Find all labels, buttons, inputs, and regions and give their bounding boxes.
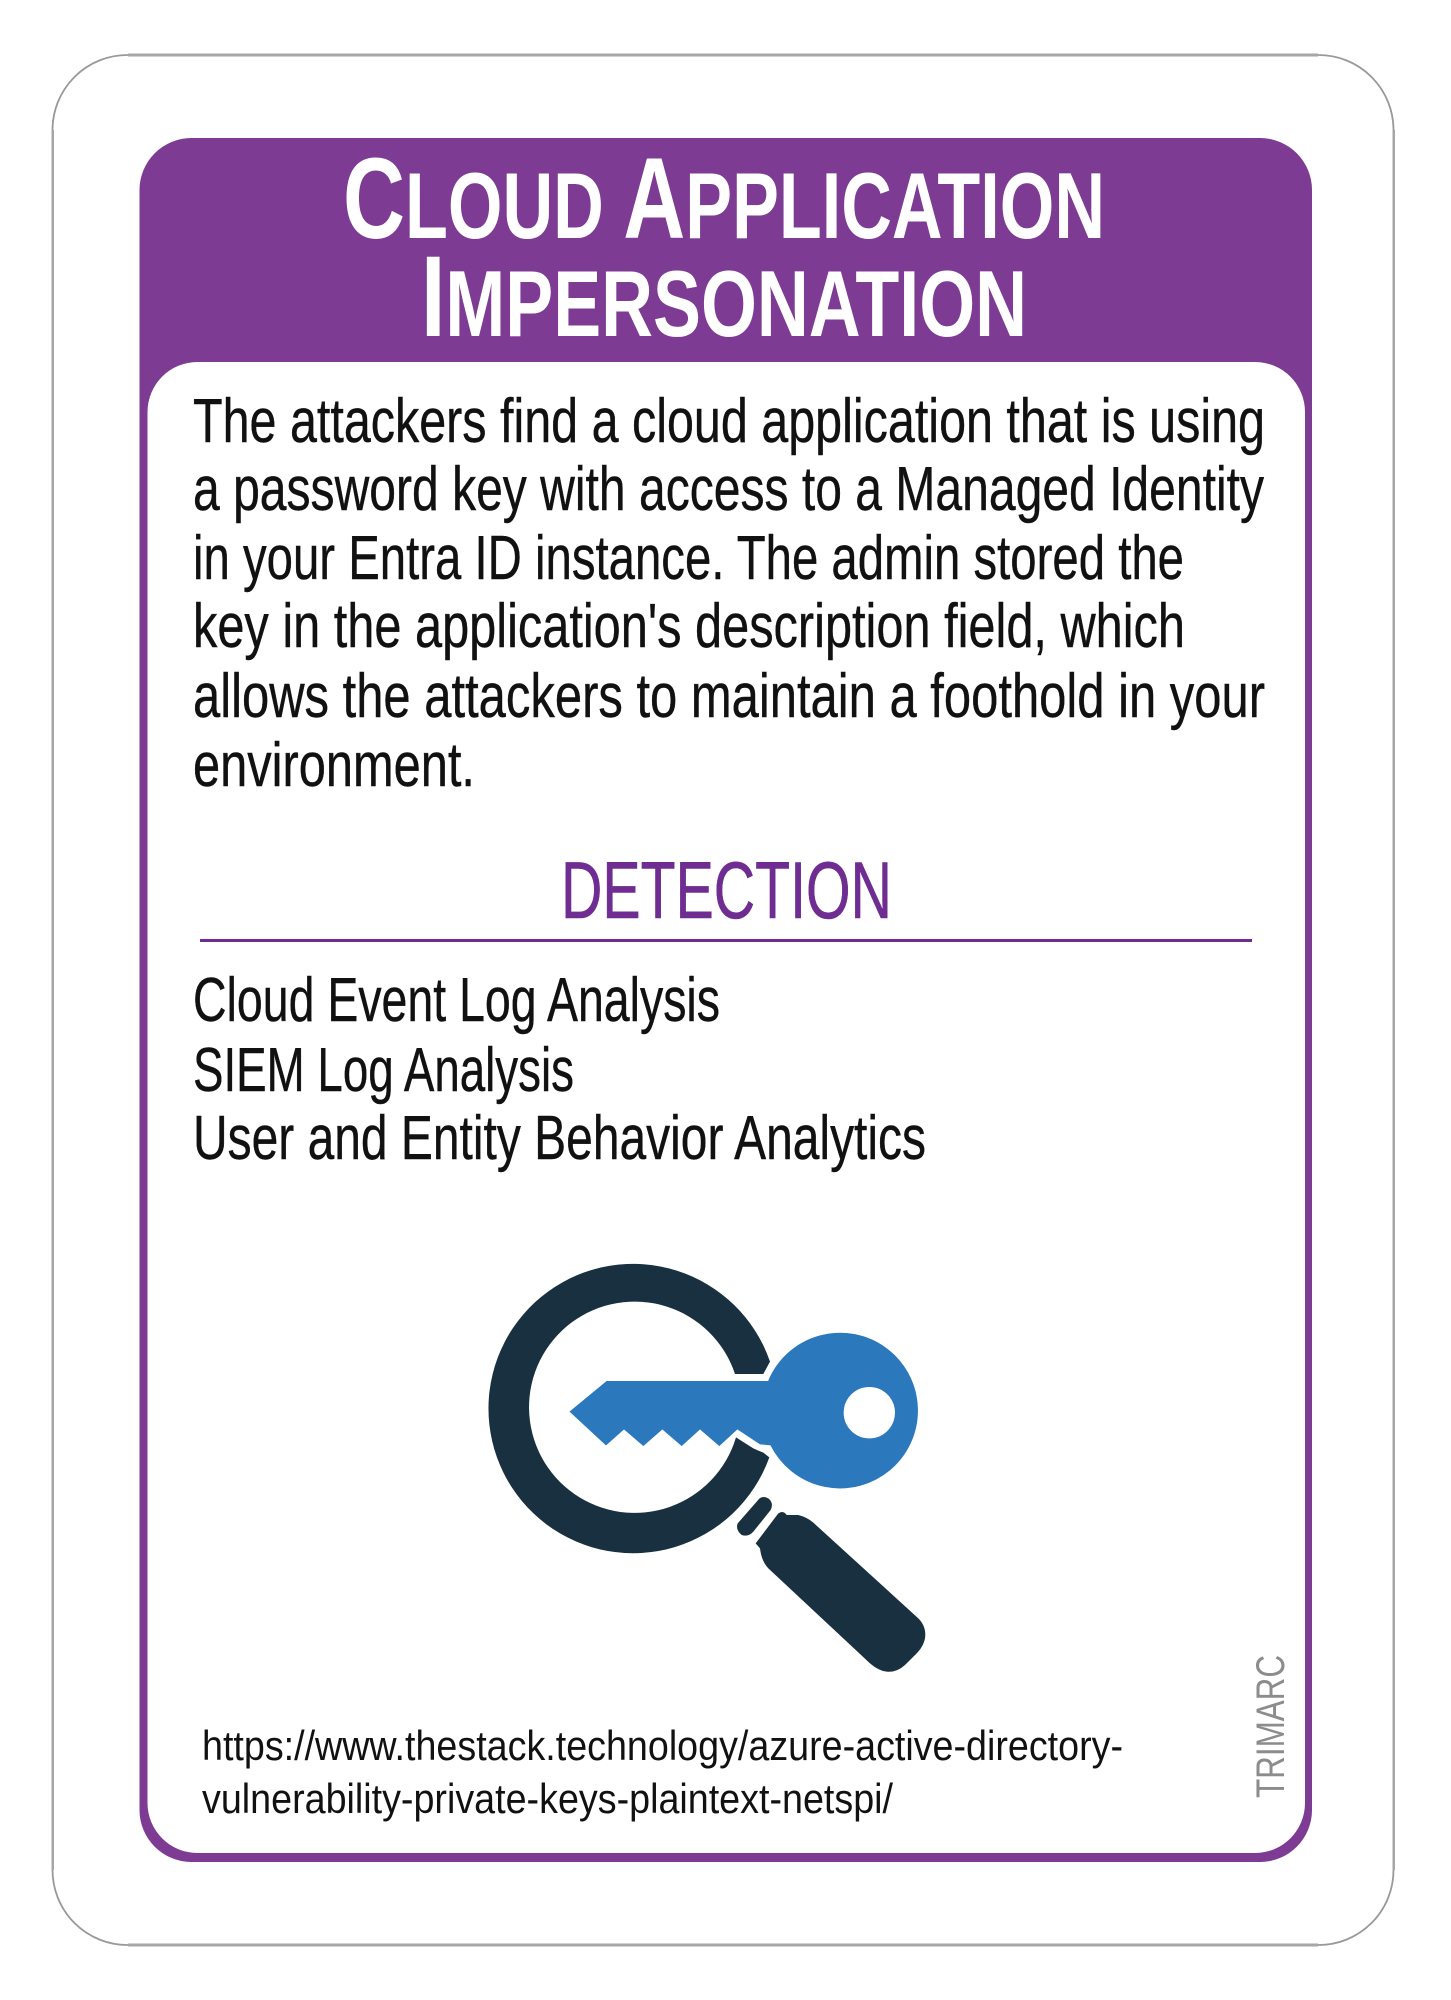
detection methods list <box>193 966 926 1173</box>
description text <box>193 387 1265 800</box>
icon: handle <box>756 1512 925 1672</box>
panel: purple card <box>140 138 1312 1862</box>
title <box>343 135 1105 361</box>
source url: vulnerability-private-keys-plaintext-netspi/ <box>202 1775 893 1822</box>
icon: lens ring <box>488 1264 770 1553</box>
brand label: TRIMARC: TRIMARC <box>1249 1655 1293 1798</box>
description text: environment. <box>193 731 475 800</box>
icon: key <box>570 1333 918 1488</box>
source url <box>202 1722 1123 1822</box>
detection methods list: Cloud Event Log Analysis <box>193 966 720 1035</box>
description text: key in the application's description field, which <box>193 592 1185 661</box>
source url: https://www.thestack.technology/azure-active-directory- <box>202 1722 1123 1769</box>
detection methods list: User and Entity Behavior Analytics <box>193 1104 926 1173</box>
title line 1: CLOUD APPLICATION <box>343 135 1105 263</box>
icon: handle connector <box>737 1497 772 1536</box>
title line 2: IMPERSONATION <box>421 233 1027 361</box>
panel: white content area <box>148 362 1305 1853</box>
detection methods list: SIEM Log Analysis <box>193 1036 574 1105</box>
icon: magnifying glass with key <box>488 1264 925 1672</box>
heading: detection: DETECTION <box>561 846 892 936</box>
